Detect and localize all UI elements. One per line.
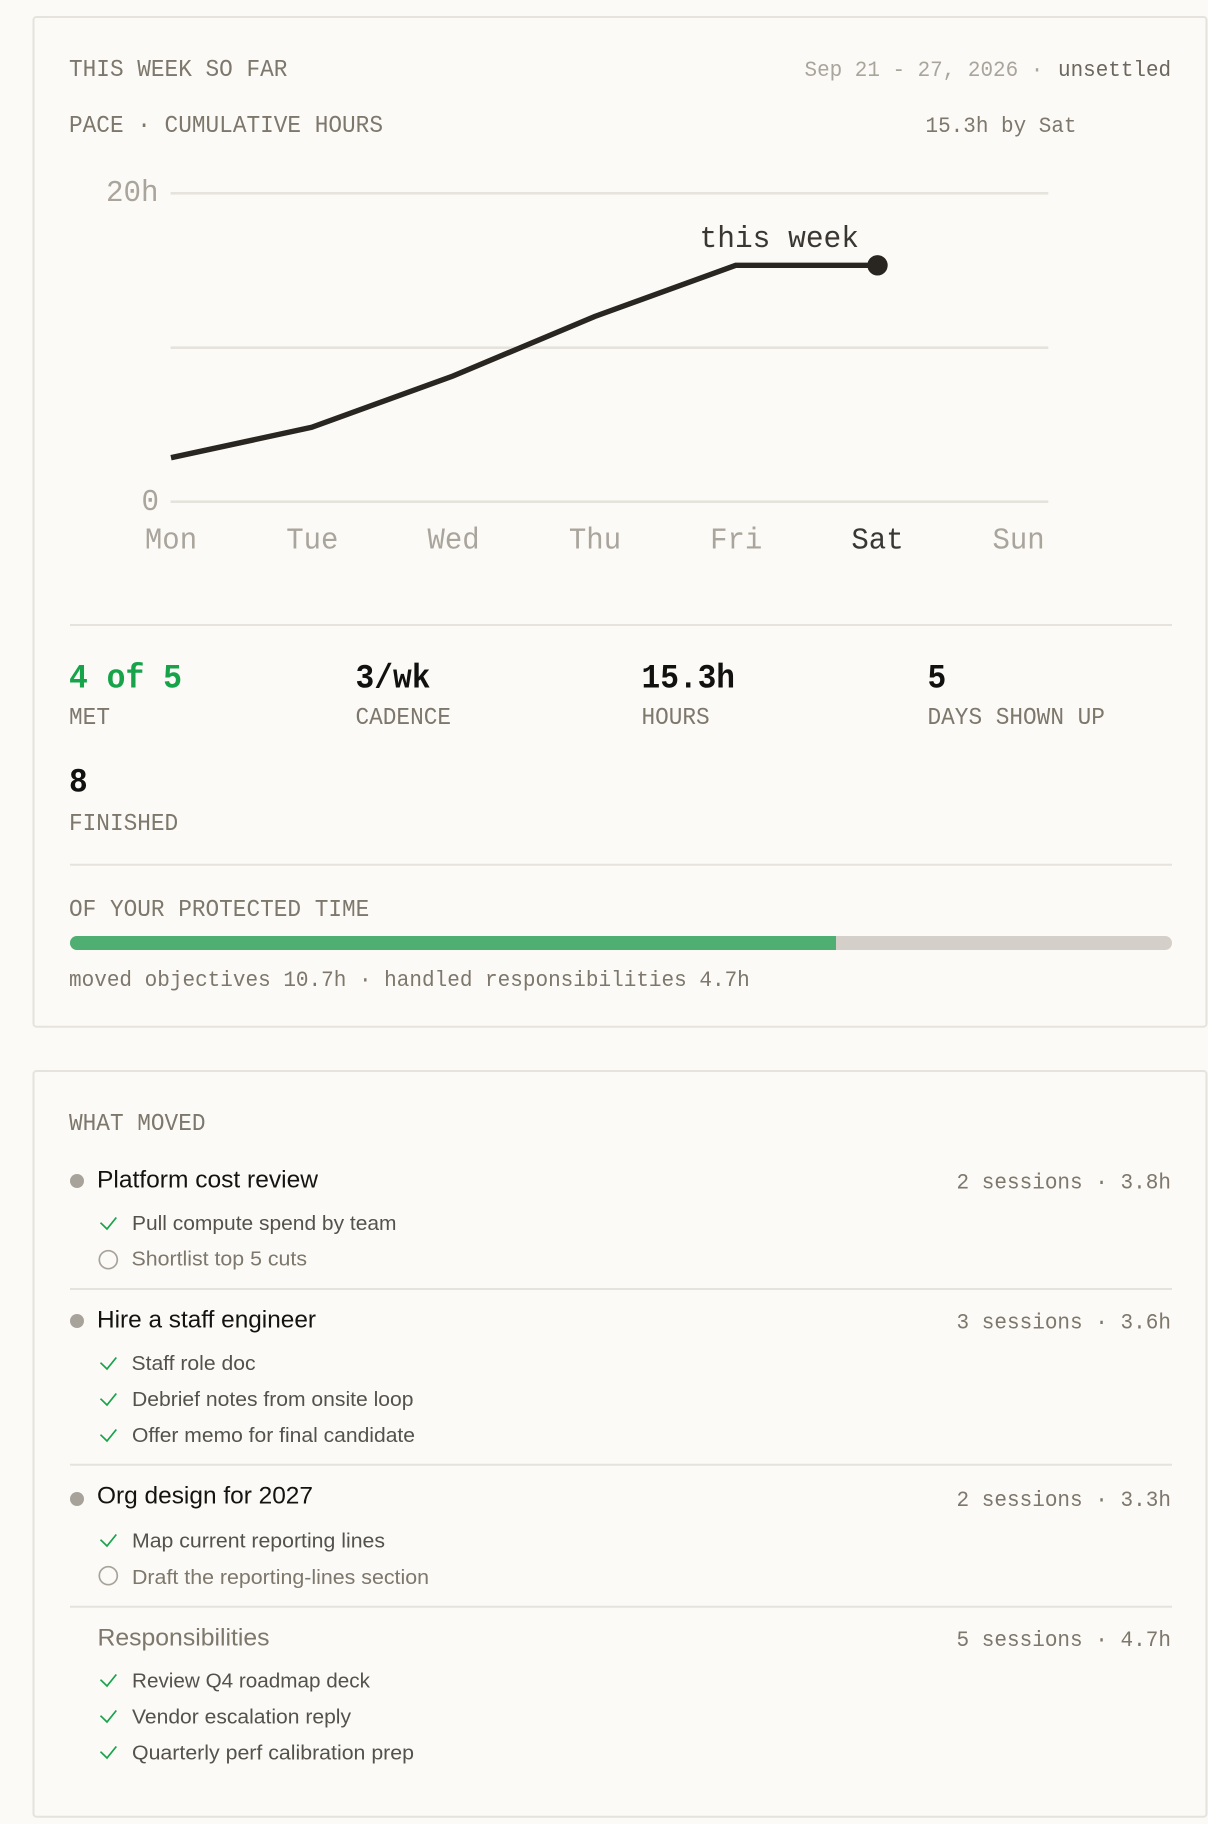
stat: finished [69, 765, 178, 838]
y axis labels: 0 [142, 485, 159, 520]
stat: hours [642, 661, 735, 732]
stat: met: 4 of 5 [69, 661, 182, 699]
objective: hire a staff engineer [70, 1307, 1171, 1447]
task: open: Shortlist top 5 cuts [132, 1248, 307, 1271]
task: done: Staff role doc [132, 1352, 256, 1375]
chart total: hours by Saturday: 15.3h by Sat [926, 113, 1076, 139]
y axis labels [106, 176, 159, 520]
x axis day labels: Mon [145, 523, 197, 558]
current point marker [867, 255, 888, 276]
x axis day labels: Tue [286, 523, 338, 558]
session summary: 2 sessions · 3.8h [956, 1169, 1171, 1195]
date range and status: unsettled [1058, 57, 1171, 83]
stat: days shown up [928, 661, 1105, 732]
x axis day labels [145, 523, 1045, 558]
task: done: Quarterly perf calibration prep [132, 1742, 414, 1765]
objective: platform cost review [70, 1167, 1171, 1271]
objective title: Hire a staff engineer [97, 1307, 316, 1334]
session summary: 5 sessions · 4.7h [956, 1627, 1171, 1653]
stat: cadence: 3/wk [356, 661, 430, 699]
group title: Responsibilities [98, 1625, 270, 1652]
objective title: Platform cost review [97, 1167, 319, 1194]
x axis day labels: Fri [710, 523, 762, 558]
stat: finished: 8 [69, 765, 88, 803]
progress bar caption: moved objectives 10.7h · handled responsibilities 4.7h [69, 967, 750, 993]
heading: this week so far: THIS WEEK SO FAR [69, 57, 287, 84]
date range and status: Sep 21 - 27, 2026 · [804, 57, 1043, 83]
series label: this week: this week [700, 222, 859, 257]
objective title: Org design for 2027 [97, 1482, 313, 1509]
chart heading: pace cumulative hours: PACE · CUMULATIVE HOURS [69, 113, 383, 140]
panel: what moved [34, 1071, 1206, 1817]
task: open: Draft the reporting-lines section [132, 1566, 429, 1589]
session summary: 2 sessions · 3.3h [956, 1487, 1171, 1513]
stat: hours: 15.3h [642, 661, 735, 699]
status dot [70, 1174, 84, 1188]
stat: hours: HOURS [642, 705, 710, 732]
panel: this week so far [34, 17, 1206, 1027]
task: done: Debrief notes from onsite loop [132, 1388, 414, 1411]
progress bar: protected time split [70, 936, 1172, 950]
stat: cadence: CADENCE [356, 705, 451, 732]
x axis day labels: Sun [992, 523, 1045, 558]
stat: met: MET [69, 705, 110, 732]
status dot [70, 1314, 84, 1328]
x axis day labels: Sat [851, 523, 904, 558]
date range and status [804, 57, 1171, 83]
y axis labels: 20h [106, 176, 158, 211]
heading: what moved: WHAT MOVED [69, 1111, 206, 1138]
stat: days shown up: DAYS SHOWN UP [928, 705, 1105, 732]
stat: cadence [356, 661, 451, 732]
objective: org design for 2027 [70, 1482, 1171, 1589]
x axis day labels: Wed [428, 523, 480, 558]
stat: met [69, 661, 182, 732]
task: done: Map current reporting lines [132, 1530, 385, 1553]
task: done: Pull compute spend by team [132, 1212, 396, 1235]
task: done: Offer memo for final candidate [132, 1424, 415, 1447]
task: done: Vendor escalation reply [132, 1706, 352, 1729]
stat: finished: FINISHED [69, 811, 178, 838]
task: done: Review Q4 roadmap deck [132, 1670, 371, 1693]
session summary: 3 sessions · 3.6h [956, 1309, 1171, 1335]
stat: days shown up: 5 [928, 661, 946, 699]
line chart: cumulative hours [106, 176, 1048, 558]
data line [171, 265, 878, 458]
x axis day labels: Thu [569, 523, 621, 558]
heading: of your protected time: OF YOUR PROTECTED TIME [69, 897, 369, 924]
status dot [70, 1492, 84, 1506]
group: responsibilities [98, 1625, 1171, 1765]
